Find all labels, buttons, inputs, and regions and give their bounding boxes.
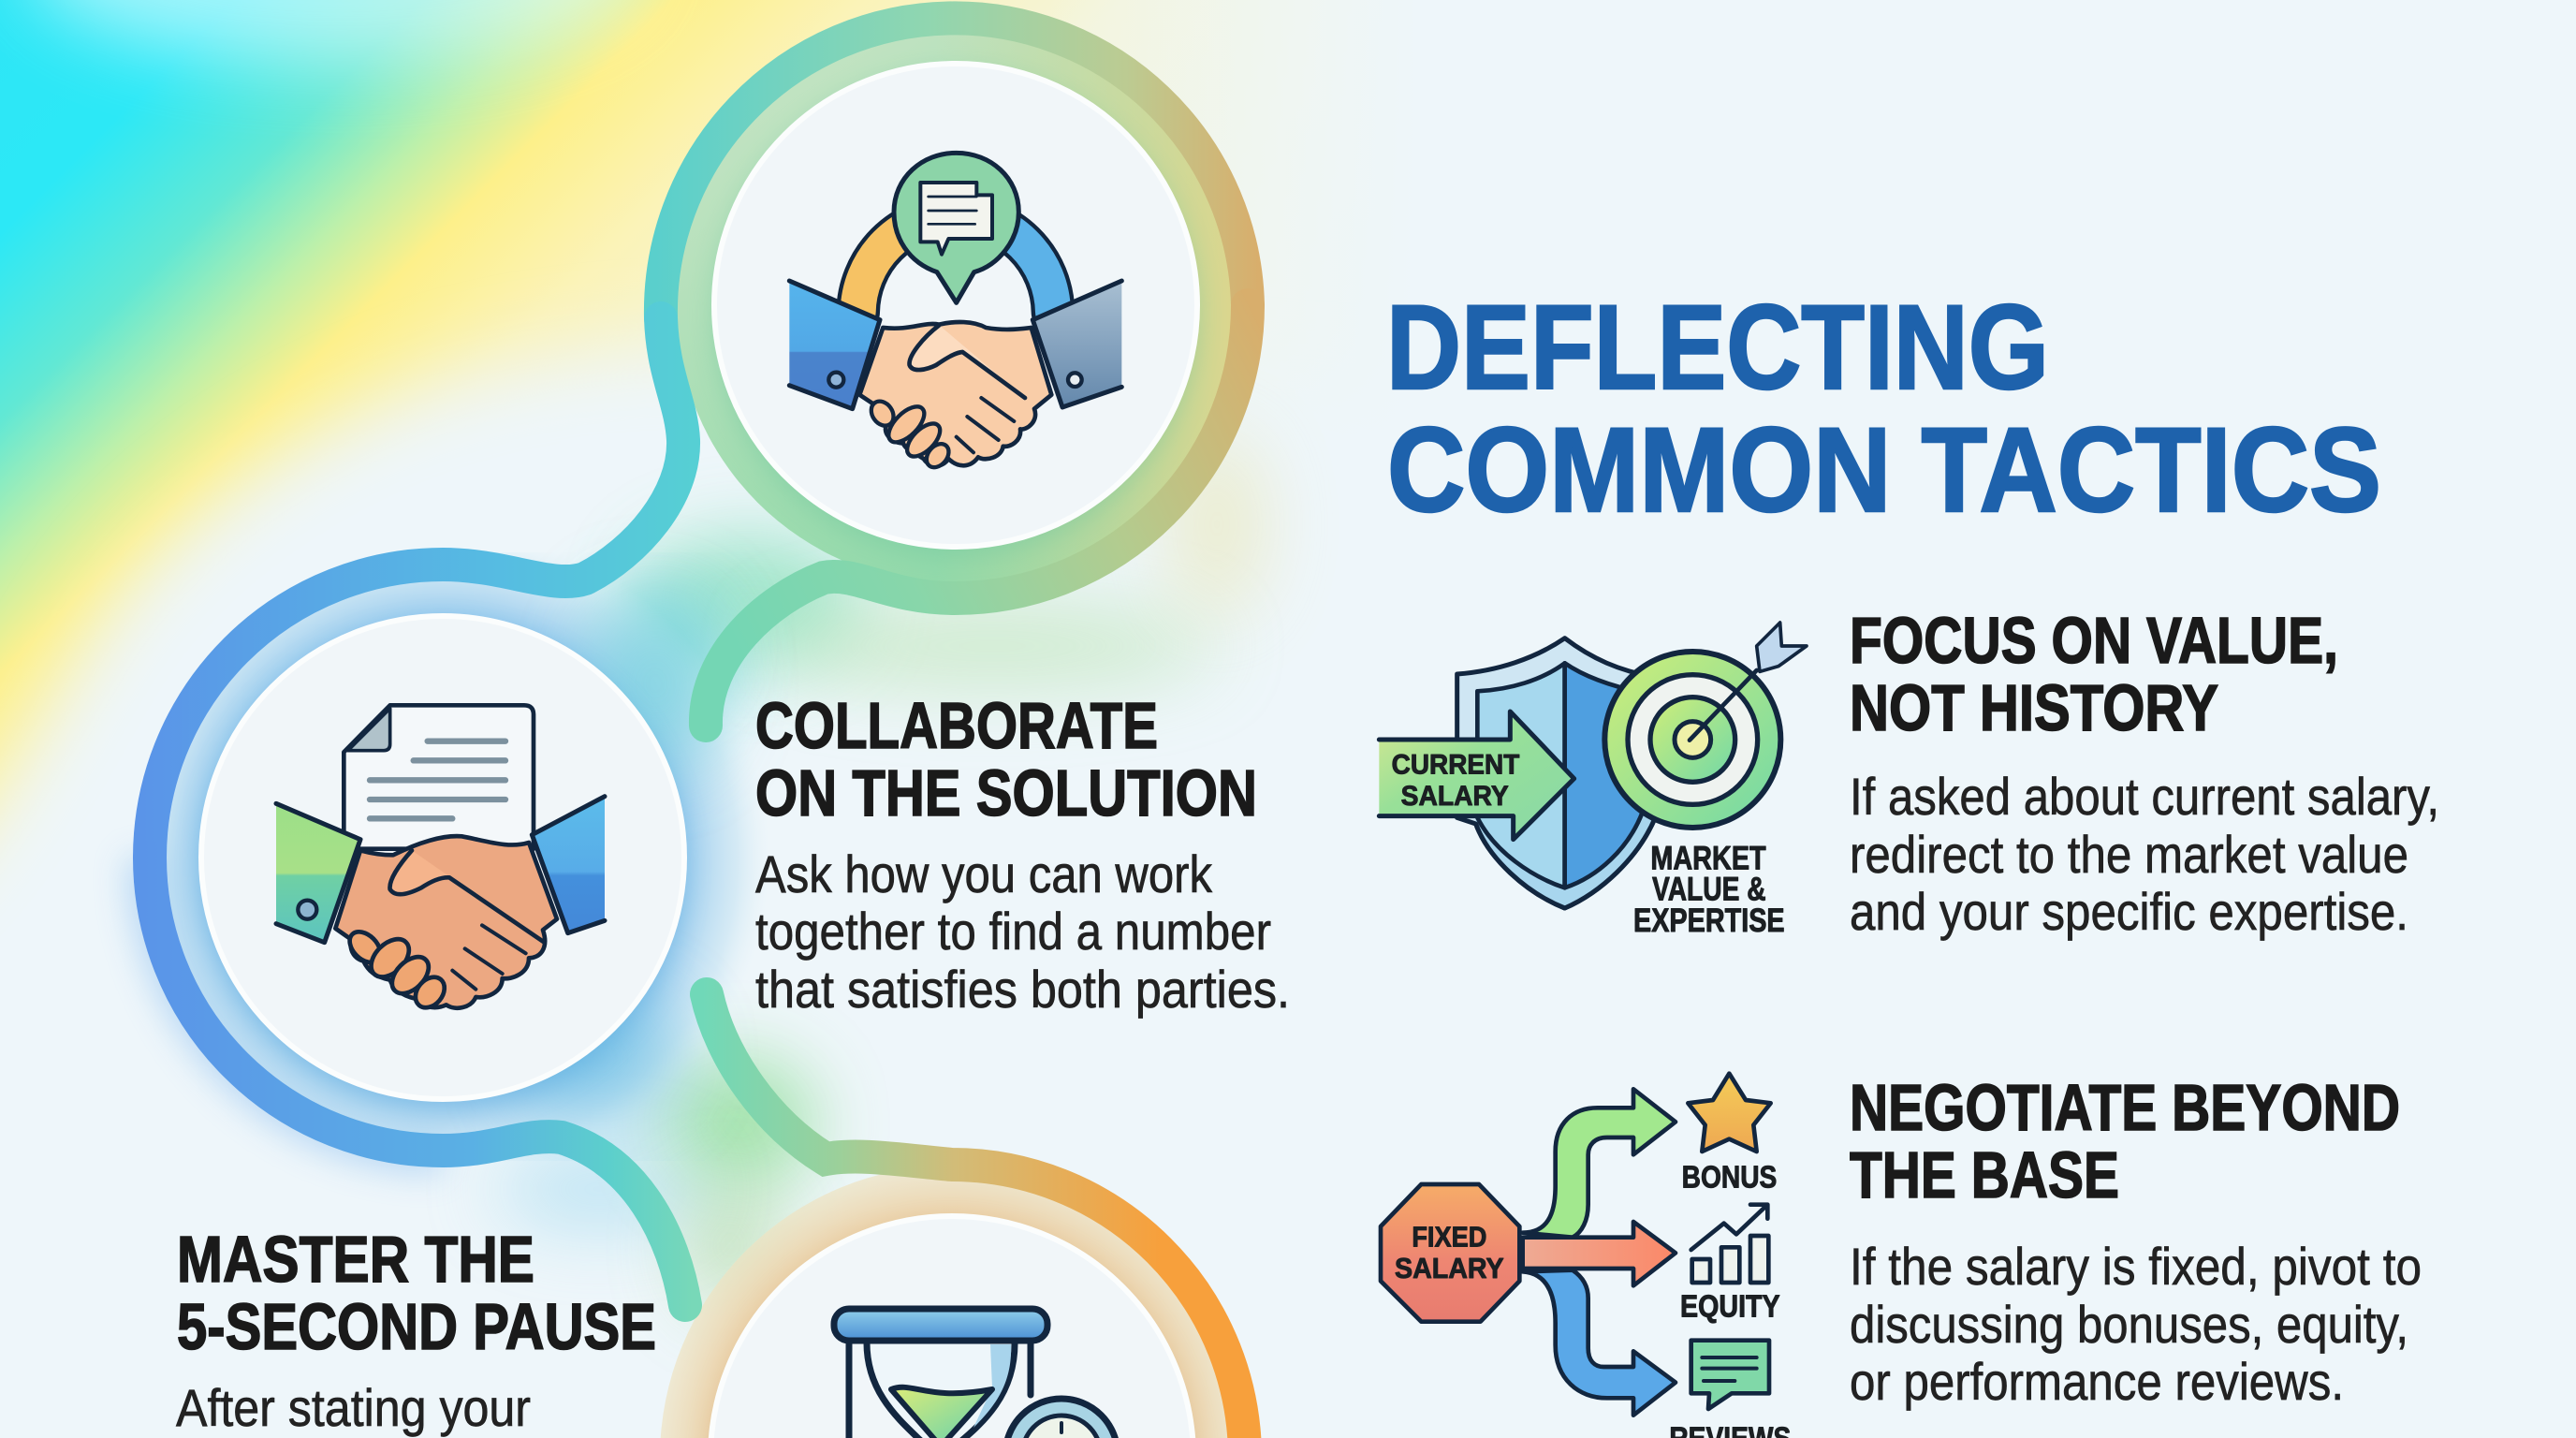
icon: fixed salary branching arrows: EQUITY (1680, 1290, 1780, 1325)
text block: negotiate body: or performance reviews. (1850, 1352, 2344, 1411)
icon: hourglass and clock (834, 1309, 1118, 1438)
icon: fixed salary branching arrows: FIXED (1412, 1222, 1486, 1254)
title: COMMON TACTICS (1387, 404, 2381, 537)
heading: focus on value: NOT HISTORY (1850, 671, 2218, 744)
text block: collaborate body: Ask how you can work (755, 844, 1213, 903)
heading: negotiate beyond the base (1850, 1071, 2400, 1211)
text block: collaborate body: together to find a number (755, 902, 1271, 961)
icon: handshake with speech bubble (789, 153, 1121, 472)
title: DEFLECTING (1386, 281, 2049, 415)
circle 2 (201, 616, 684, 1108)
text block: negotiate body: discussing bonuses, equity, (1850, 1295, 2408, 1354)
icon: shield, arrow and target: EXPERTISE (1633, 902, 1785, 939)
text block: focus on value body (1850, 767, 2439, 941)
heading: collaborate on the solution (755, 689, 1257, 829)
heading: master the 5-second pause (177, 1223, 656, 1363)
icon: shield, arrow and target: VALUE & (1652, 872, 1766, 908)
text block: focus on value body: and your specific expertise. (1850, 882, 2408, 941)
ring 3 stroke and tail (707, 994, 1245, 1438)
heading: focus on value (1850, 604, 2338, 744)
heading: master the 5-second pause: MASTER THE (177, 1223, 534, 1296)
heading: negotiate beyond the base: NEGOTIATE BEYOND (1850, 1071, 2400, 1144)
text block: collaborate body (755, 844, 1290, 1019)
circle 3 (710, 1216, 1193, 1438)
heading: collaborate on the solution: ON THE SOLUTION (755, 756, 1257, 829)
text block: collaborate body: that satisfies both parties. (755, 960, 1290, 1019)
icon: shield, arrow and target (1379, 623, 1807, 939)
circle 1 (714, 64, 1197, 556)
icon: handshake with document (276, 705, 605, 1013)
ring 1 inner band (676, 26, 1234, 584)
icon: fixed salary branching arrows: SALARY (1395, 1253, 1504, 1284)
heading: master the 5-second pause: 5-SECOND PAUSE (177, 1290, 656, 1363)
ring 2 stroke and tail (150, 318, 685, 1305)
ring 1 stroke and tail (661, 18, 1248, 726)
heading: focus on value: FOCUS ON VALUE, (1850, 604, 2338, 677)
title (1386, 281, 2381, 537)
text block: negotiate body (1850, 1237, 2422, 1411)
icon: shield, arrow and target: CURRENT (1392, 750, 1519, 781)
icon: shield, arrow and target: SALARY (1401, 781, 1509, 812)
icon: fixed salary branching arrows (1381, 1074, 1791, 1438)
heading: negotiate beyond the base: THE BASE (1850, 1138, 2119, 1211)
text block: pause body: After stating your (176, 1378, 531, 1437)
icon: fixed salary branching arrows: BONUS (1682, 1160, 1777, 1195)
ring 2 inner band (167, 552, 760, 1157)
text block: focus on value body: If asked about current salary, (1850, 767, 2439, 826)
panel: connected ring path (115, 18, 1248, 1438)
icon: shield, arrow and target: MARKET (1650, 840, 1766, 876)
text block: focus on value body: redirect to the market value (1850, 825, 2408, 884)
heading: collaborate on the solution: COLLABORATE (755, 689, 1158, 762)
ring 3 inner band (660, 1166, 1244, 1438)
text block: negotiate body: If the salary is fixed, pivot to (1850, 1237, 2422, 1296)
